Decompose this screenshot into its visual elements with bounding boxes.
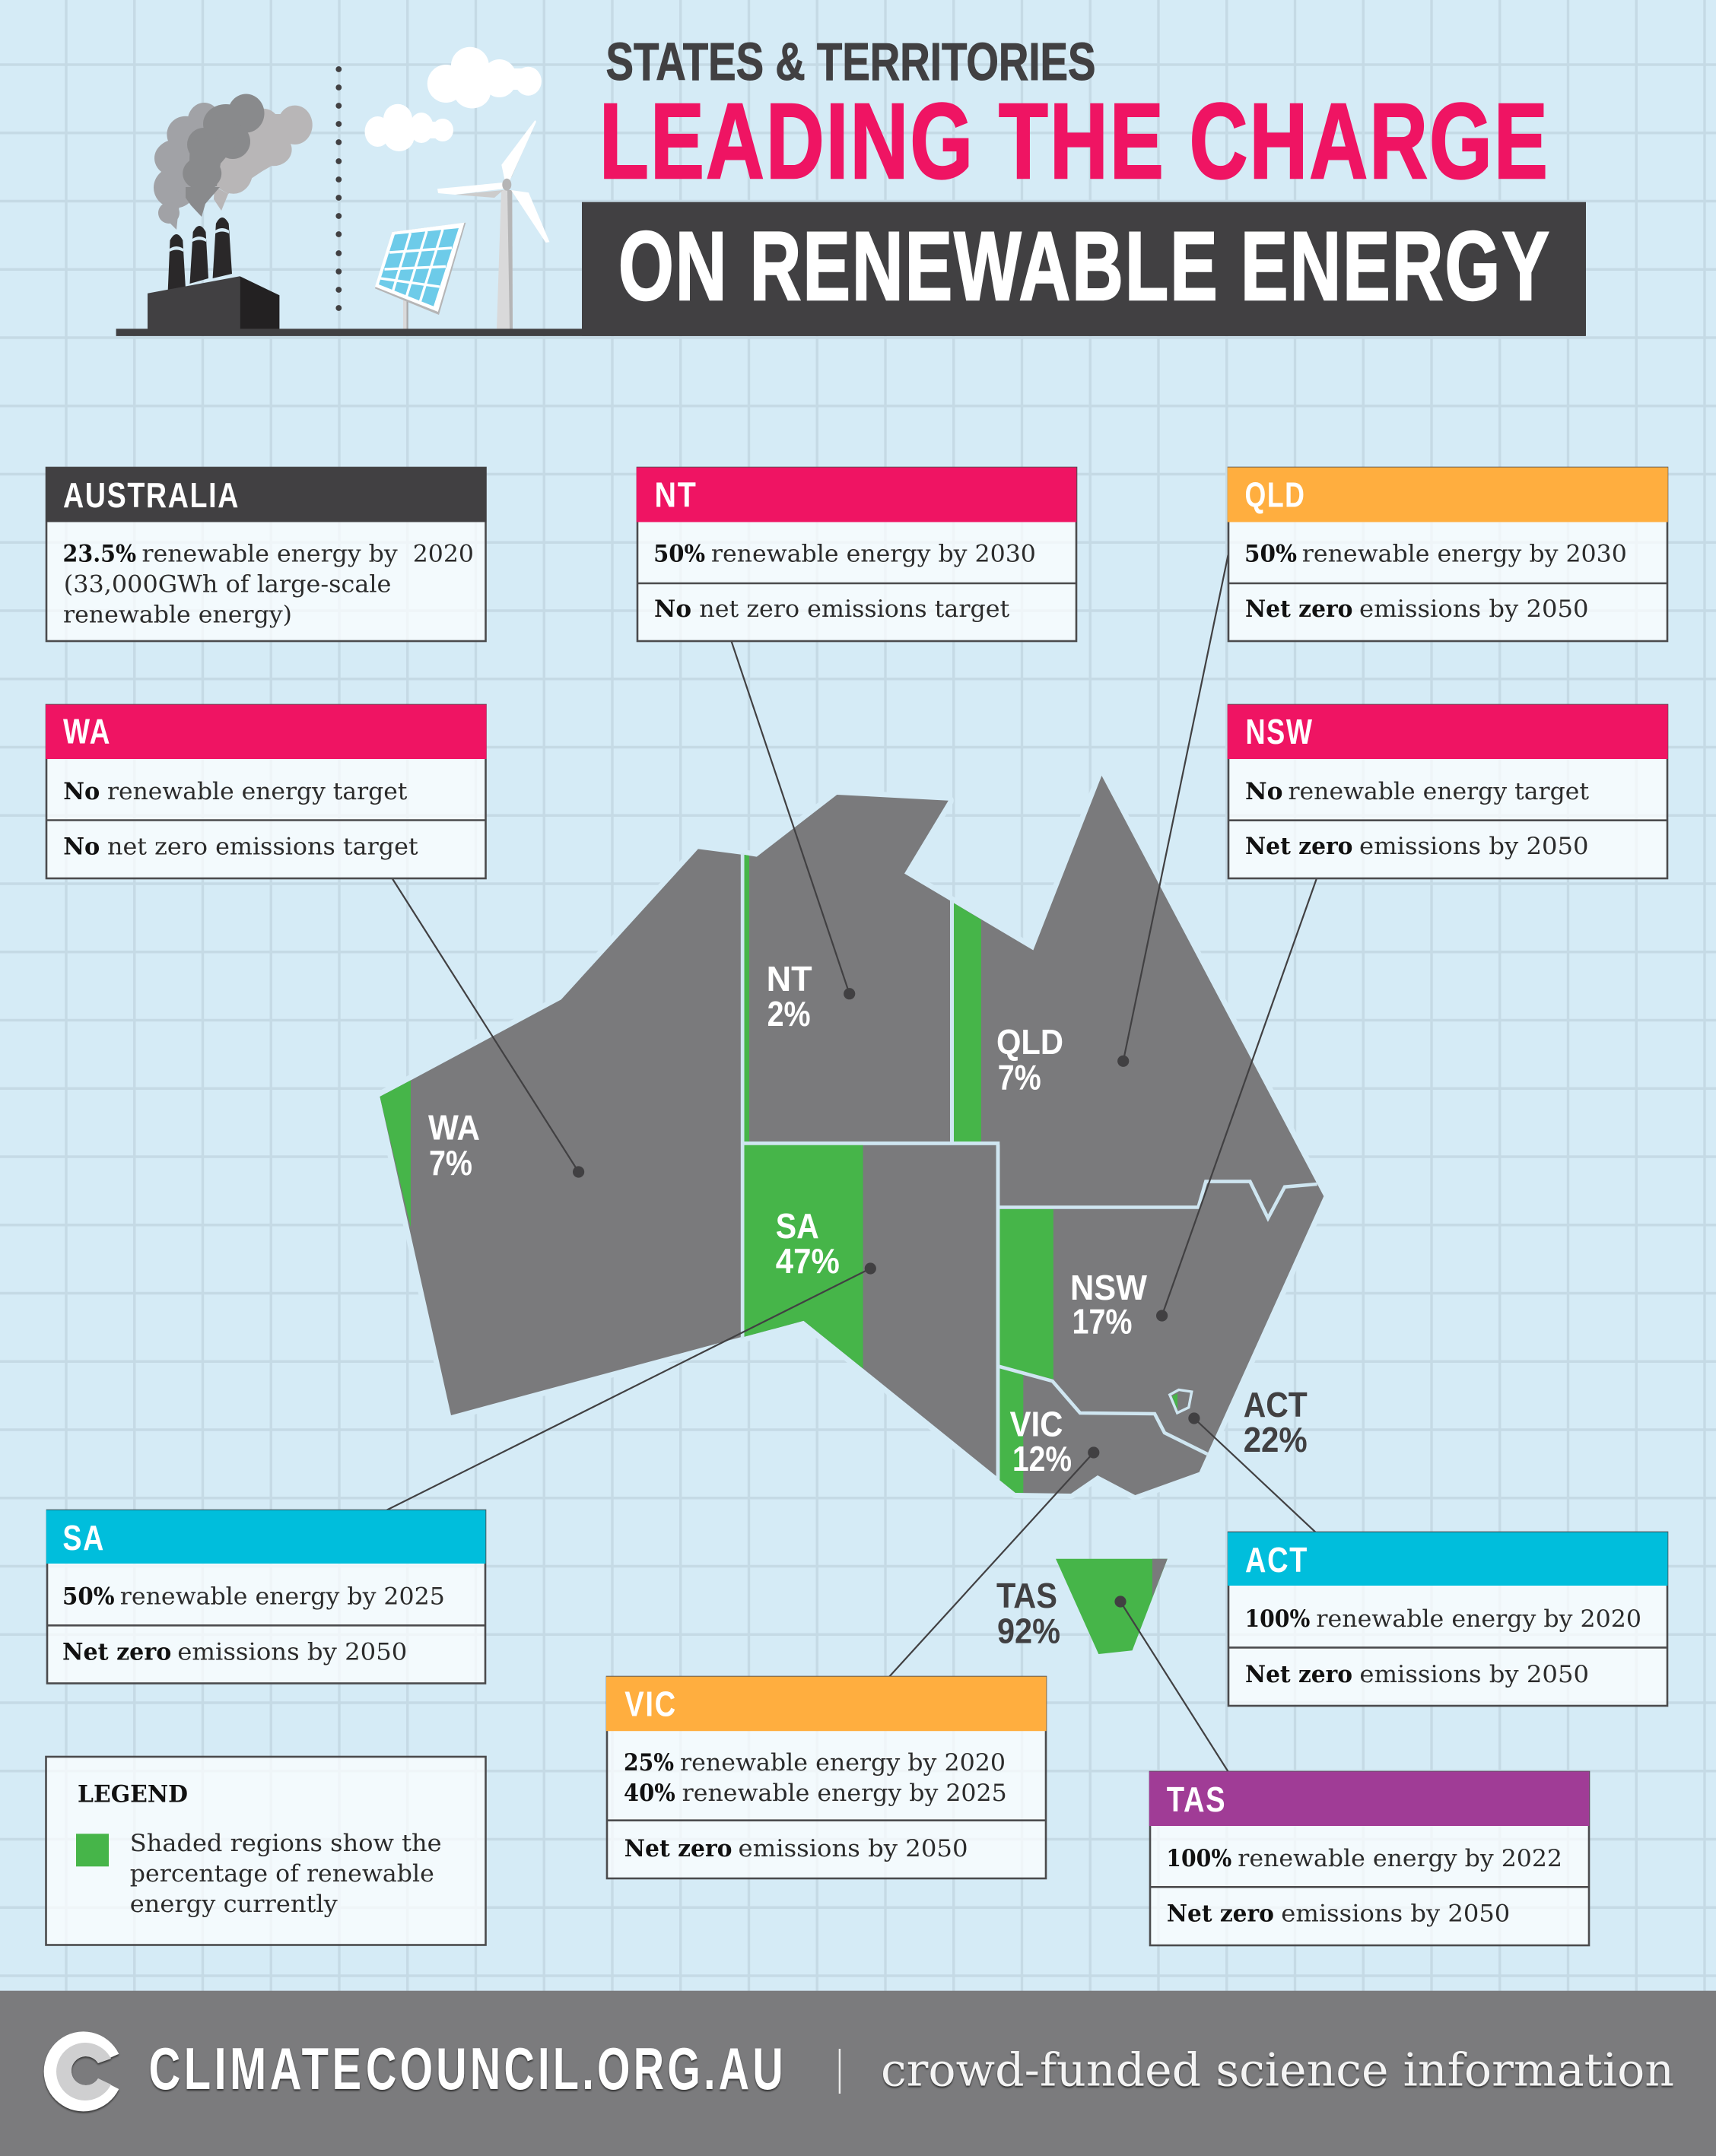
map halo [380,776,1324,1495]
label: VIC 12%: VIC [1010,1405,1063,1444]
panel: Australia [46,467,487,641]
header illustration [116,47,1586,336]
label: SA 47%: 47% [776,1241,840,1281]
panel: TAS [1149,1771,1589,1945]
panel: ACT: 100% [1244,1605,1310,1633]
panel: QLD: 50% [1244,540,1297,567]
region: SA [744,1145,996,1476]
label: QLD 7%: 7% [998,1057,1041,1097]
label: WA 7%: WA [428,1108,480,1148]
label: QLD 7% [996,1022,1063,1097]
panel: WA: WA [63,712,111,751]
panel: WA: No [63,778,100,805]
panel: QLD [1228,467,1668,641]
panel: QLD: QLD [1244,475,1305,514]
label: NSW 17% [1070,1268,1148,1342]
panel: ACT: ACT [1245,1540,1308,1580]
label: TAS 92%: 92% [997,1611,1060,1651]
leader lines and dots [386,555,1317,1771]
footer tagline: crowd-funded science information [881,2044,1674,2097]
panel: NSW: No [1245,778,1282,805]
label: NT 2% [767,959,812,1034]
icon: factory [148,218,279,329]
label: WA 7%: 7% [429,1143,472,1183]
panel: NSW: emissions by 2050 [1359,833,1588,860]
panel: TAS: TAS [1167,1780,1226,1819]
panel: VIC: emissions by 2050 [738,1835,968,1862]
panel: WA: No [63,834,100,861]
panel: ACT: Net zero [1245,1661,1352,1688]
footer divider [839,2049,841,2094]
panel: WA: renewable energy target [107,778,408,805]
panel: legend: percentage of renewable [130,1860,434,1888]
panel: VIC: 25% [624,1749,674,1777]
panel: SA: SA [62,1518,105,1557]
panel: TAS: renewable energy by 2022 [1238,1845,1562,1872]
label: NSW 17%: 17% [1072,1302,1132,1342]
label: ACT 22% [1244,1385,1308,1459]
panel: VIC: Net zero [624,1835,732,1862]
panel: WA: net zero emissions target [107,834,418,861]
panel: QLD: Net zero [1245,595,1352,623]
label: QLD 7%: QLD [996,1022,1063,1062]
panel: TAS: 100% [1166,1845,1231,1872]
panel: VIC: VIC [624,1684,677,1724]
label: TAS 92%: TAS [996,1576,1057,1615]
panel: Australia: AUSTRALIA [63,475,240,515]
panel: VIC: 40% [624,1780,675,1807]
icon: wind turbine [437,119,549,329]
label: NT 2%: NT [767,959,812,999]
panel: legend: energy currently [130,1891,338,1918]
label: NT 2%: 2% [767,994,811,1034]
icon: clouds [365,47,542,151]
icon: climate council logo [44,2031,119,2111]
panel: SA [46,1510,485,1684]
panel: ACT: emissions by 2050 [1359,1661,1589,1688]
label: SA 47% [776,1206,840,1281]
panel: NT: No [654,595,691,623]
panel: WA [46,704,487,878]
label: VIC 12%: 12% [1012,1439,1072,1478]
label: ACT 22%: 22% [1244,1420,1308,1459]
panel: NSW: renewable energy target [1289,778,1590,805]
label: TAS 92% [996,1576,1060,1651]
title: states and territories: STATES & TERRITORIES [605,32,1095,91]
panel: NSW: Net zero [1245,833,1352,860]
panel: TAS: Net zero [1167,1900,1274,1927]
region: ACT [1170,1390,1192,1413]
panel: legend: Shaded regions show the [130,1830,442,1857]
footer site name: COUNCIL.ORG.AU [366,2035,786,2102]
footer site name [149,2035,786,2102]
panel: ACT: renewable energy by 2020 [1316,1605,1641,1633]
footer [0,1991,1716,2156]
region: WA [380,849,741,1415]
panel: NT: NT [654,475,697,514]
label: WA 7% [428,1108,480,1183]
panel: VIC [606,1677,1047,1878]
icon: solar panel [375,223,466,329]
panel: NT: renewable energy by 2030 [711,540,1036,567]
region: NT [744,795,950,1142]
panel: VIC: renewable energy by 2025 [682,1780,1007,1807]
map of Australia [380,776,1324,1654]
panel: VIC: renewable energy by 2020 [680,1749,1006,1777]
panel: QLD: emissions by 2050 [1359,595,1588,623]
panel: NSW: NSW [1246,712,1313,751]
panel: NT: net zero emissions target [699,595,1010,623]
footer site name: CLIMATE [149,2035,365,2102]
panel: ACT [1228,1532,1667,1706]
region: QLD NSW VIC landmass [954,776,1324,1495]
panel: legend: LEGEND [78,1780,188,1808]
region: TAS [1056,1559,1168,1654]
panel: legend [46,1757,485,1945]
panel: QLD: renewable energy by 2030 [1302,540,1627,567]
icon: smoke [154,94,313,230]
panel: SA: renewable energy by 2025 [120,1583,445,1611]
panel: SA: Net zero [62,1638,171,1665]
panel: Australia: 23.5% [62,541,136,568]
dotted divider [335,66,342,311]
ground bar [116,329,1586,336]
panel: NSW [1228,704,1668,878]
state borders [742,853,1317,1479]
panel: Australia: renewable energy by 2020 [141,541,474,568]
panel: TAS: emissions by 2050 [1281,1900,1510,1927]
label: SA 47%: SA [776,1206,819,1246]
panel: SA: 50% [62,1583,115,1611]
label: ACT 22%: ACT [1244,1385,1308,1424]
label: NSW 17%: NSW [1070,1268,1148,1307]
panel: NT: 50% [653,540,705,567]
panel: Australia: (33,000GWh of large-scale [64,571,391,599]
label: VIC 12% [1010,1405,1072,1478]
panel: NT [637,467,1076,641]
panel: SA: emissions by 2050 [177,1638,407,1665]
panel: Australia: renewable energy) [63,602,292,629]
